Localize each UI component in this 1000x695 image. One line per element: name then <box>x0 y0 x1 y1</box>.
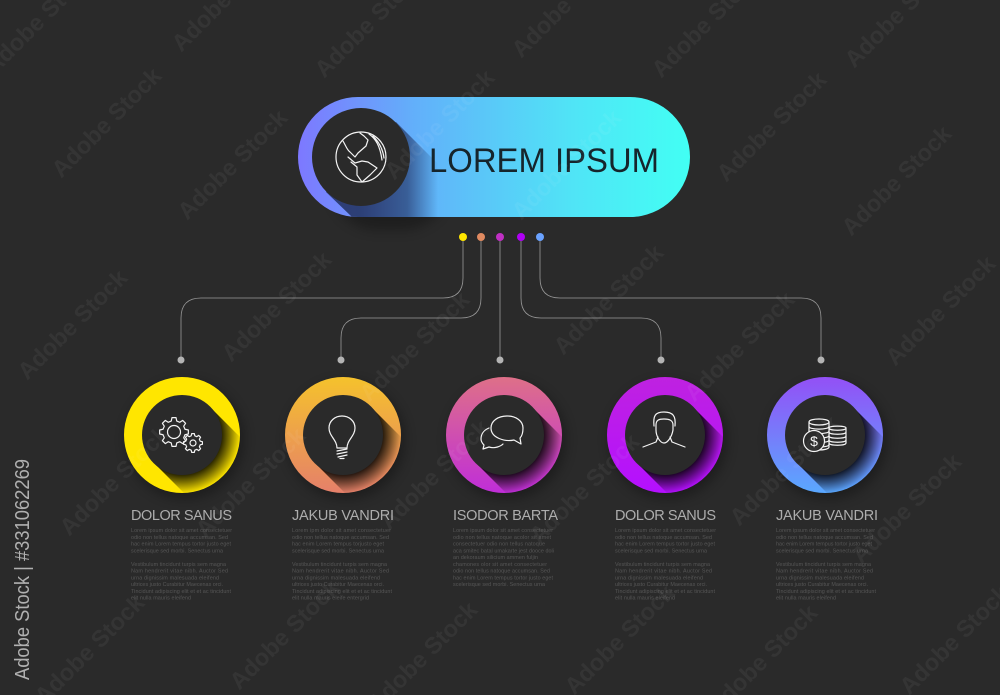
description: ultrices justo Curabitur Maecenas orci. <box>292 582 384 588</box>
description: Lorem ipsum dolor sit amet consectetuer <box>131 528 232 534</box>
step 1: gears <box>124 377 242 600</box>
description: Lorem ipm dolor sit amet consectetuer <box>292 528 391 534</box>
description: elit nulla mauris eleifend <box>776 596 836 602</box>
step 2: light bulb <box>285 377 402 600</box>
description: Nam hendrerit vitae nibh. Auctor Sed <box>131 568 228 574</box>
description: scelerisque sed morbi. Senectus urna <box>776 548 868 554</box>
icon: coins: $ <box>810 433 818 449</box>
title: LOREM IPSUM <box>429 142 659 180</box>
badge <box>285 377 402 496</box>
watermark pattern: Adobe Stock <box>354 286 475 406</box>
name: JAKUB VANDRI <box>292 508 394 524</box>
description: aca smitec batal umakarte jest dooce doli <box>453 548 554 554</box>
watermark pattern: Adobe Stock <box>836 120 957 240</box>
description: Tincidunt adipiscing elit et et ac tincidunt <box>292 589 392 595</box>
description: Nam hendrerit vitae nibh. Auctor Sed <box>615 568 712 574</box>
badge <box>446 377 564 496</box>
name: ISODOR BARTA <box>453 508 558 524</box>
icon disc <box>312 108 410 206</box>
description: scelerisque sed morbi. Senectus urna <box>292 548 384 554</box>
step 4: person <box>607 377 724 600</box>
description: hac enim Lorem tempus tortor justo eget <box>776 542 872 548</box>
description: Nam hendrerit vitae nibh. Auctor Sed <box>292 568 389 574</box>
description <box>131 528 232 602</box>
step 5: coins <box>767 377 884 600</box>
stock id vertical caption: Adobe Stock | #331062269 <box>12 459 34 680</box>
badge <box>767 377 884 496</box>
description: odio non tellus natoque accumsan. Sed <box>776 535 873 541</box>
watermark pattern: Adobe Stock <box>846 448 967 568</box>
description: Vestibulum tincidunt turpis sem magna <box>615 562 710 568</box>
icon: gears <box>160 418 202 452</box>
description: Vestibulum tincidunt turpis sem magna <box>292 562 387 568</box>
watermark pattern: Adobe Stock <box>379 64 500 184</box>
description: scelerisque sed morbi. Senectus urna <box>453 582 545 588</box>
description: odio non tellus natoque accumsan. Sed <box>453 568 550 574</box>
watermark pattern: Adobe Stock <box>880 250 1000 370</box>
description: consectetuer odio non tellus natoque <box>453 542 545 548</box>
description: Tincidunt adipiscing elit et et ac tincidunt <box>131 589 232 595</box>
description <box>453 528 554 588</box>
watermark pattern: Adobe Stock <box>711 66 832 186</box>
watermark pattern: Adobe Stock <box>506 104 627 224</box>
description: Lorem ipsum dolor sit amet consectetuer <box>453 528 553 534</box>
description: Lorem ipsum dolor sit amet consectetuer <box>615 528 716 534</box>
connector lines <box>181 240 821 358</box>
description: Lorem ipsum dolor sit amet consectetuer <box>776 528 875 534</box>
description <box>776 528 876 602</box>
description <box>615 528 716 602</box>
description: elit nulla mauris eleifend <box>131 596 191 602</box>
name: JAKUB VANDRI <box>776 508 878 524</box>
watermark pattern: Adobe Stock <box>216 246 337 366</box>
description: Vestibulum tincidunt turpis sem magna <box>131 562 226 568</box>
watermark pattern: Adobe Stock <box>172 104 293 224</box>
badge <box>607 377 724 496</box>
icon: coins <box>804 419 846 452</box>
description: urna dignissim malesuada eleifend <box>292 576 380 582</box>
header pill <box>298 97 690 230</box>
description: scelerisque sed morbi. Senectus urna <box>131 548 223 554</box>
description: Tincidunt adipiscing elit et et ac tincidunt <box>776 589 876 595</box>
pill long shadow <box>326 122 438 217</box>
icon: person <box>643 412 685 447</box>
description: chamones olor sit amet consectetuer <box>453 562 547 568</box>
description: elit nulla mauris eleife entergrid <box>292 596 369 602</box>
watermark pattern: Adobe Stock <box>224 574 345 694</box>
description: hac enim Lorem tempus tortor justo eget <box>453 576 554 582</box>
description: odio non tellus natoque accumsan. Sed <box>292 535 389 541</box>
description: urna dignissim malesuada eleifend <box>131 576 219 582</box>
watermark pattern: Adobe Stock <box>524 428 645 548</box>
watermark pattern: Adobe Stock <box>724 410 845 530</box>
description: Vestibulum tincidunt turpis sem magna <box>776 562 871 568</box>
description: hac enim Lorem tempus tortor justo eget <box>131 542 232 548</box>
top connector dots <box>459 233 544 241</box>
bottom connector dots <box>178 356 824 364</box>
description: hac enim Lorem tempus torjusto eget <box>292 542 384 548</box>
name: DOLOR SANUS <box>131 508 232 524</box>
description: urna dignissim malesuada eleifend <box>776 576 864 582</box>
description: odio non tellus natoque accumsan. Sed <box>615 535 712 541</box>
watermark pattern: Adobe Stock <box>548 239 669 359</box>
description: Nam hendrerit vitae nibh. Auctor Sed <box>776 568 873 574</box>
badge <box>124 377 242 496</box>
description: ultrices justo Curabitur Maecenas orci. <box>615 582 707 588</box>
description: elit nulla mauris eleifend <box>615 596 675 602</box>
description: odio non tellus natoque accumsan. Sed <box>131 535 228 541</box>
description: odio non tellus natoque acolor sit amet <box>453 535 552 541</box>
icon: globe <box>336 132 386 182</box>
description <box>292 528 392 602</box>
name: DOLOR SANUS <box>615 508 716 524</box>
icon: light bulb <box>329 416 355 458</box>
description: scelerisque sed morbi. Senectus urna <box>615 548 707 554</box>
description: Tincidunt adipiscing elit et et ac tincidunt <box>615 589 716 595</box>
watermark pattern: Adobe Stock <box>374 414 495 534</box>
icon: speech bubbles <box>481 416 523 449</box>
description: an dekoraum silicium ammen fuljin <box>453 555 538 561</box>
description: urna dignissim malesuada eleifend <box>615 576 703 582</box>
watermark pattern: Adobe Stock <box>12 264 133 384</box>
description: ultrices justo Curabitur Maecenas orci. <box>776 582 868 588</box>
watermark pattern: Adobe Stock <box>46 62 167 182</box>
pill drop shadow <box>330 130 450 230</box>
description: hac enim Lorem tempus tortor justo eget <box>615 542 716 548</box>
pill body <box>298 97 690 217</box>
description: ultrices justo Curabitur Maecenas orci. <box>131 582 223 588</box>
watermark pattern: Adobe Stock <box>679 286 800 406</box>
watermark pattern: Adobe Stock <box>190 422 311 542</box>
step 3: speech bubbles <box>446 377 564 587</box>
watermark pattern: Adobe Stock <box>54 420 175 540</box>
